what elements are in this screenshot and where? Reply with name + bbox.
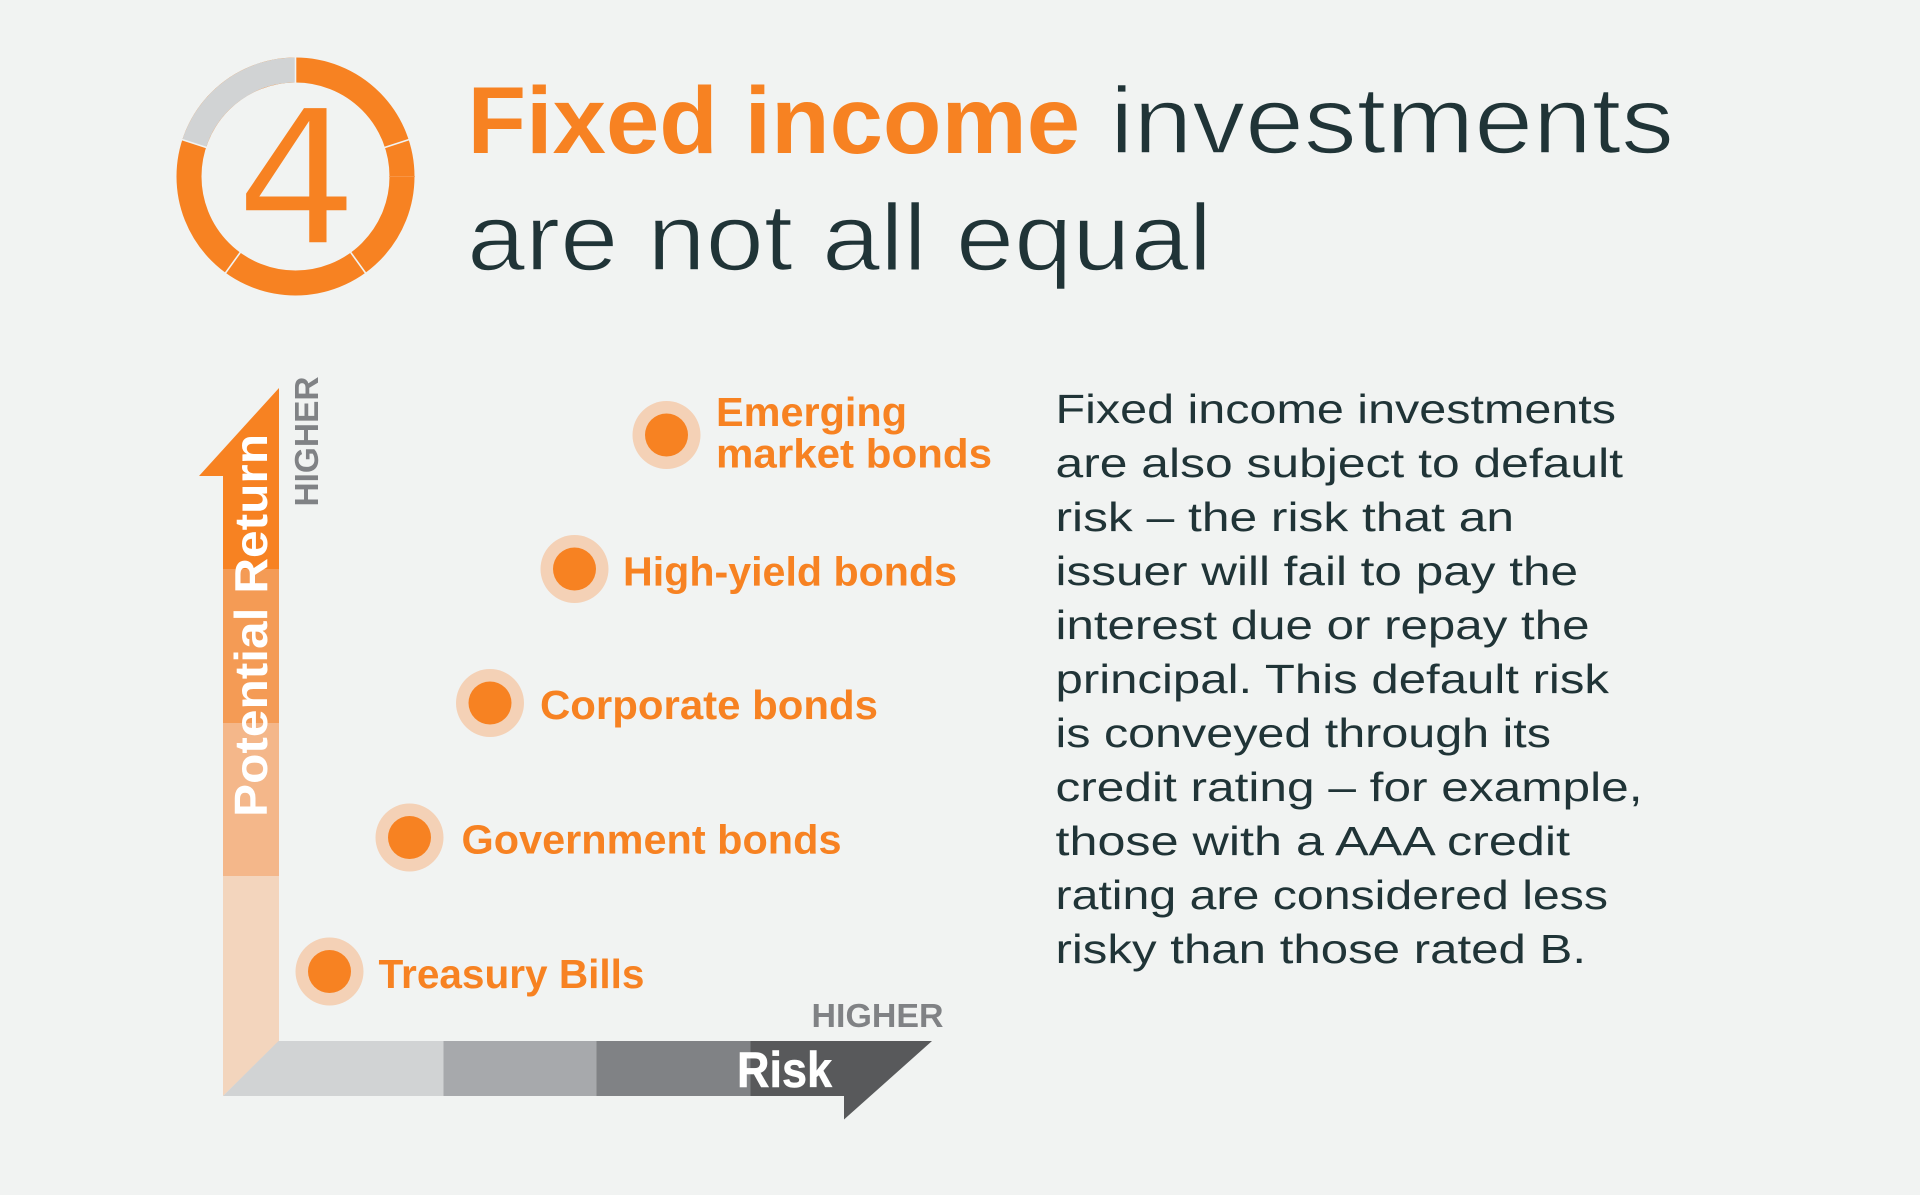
horizontal axis arrow: risk xyxy=(223,1041,932,1120)
data point: Government bonds xyxy=(376,804,842,872)
title: are not all equal xyxy=(467,185,1212,291)
icon: progress ring with number 4 xyxy=(181,56,415,287)
body text: default risk explanation: credit rating – for example, xyxy=(1056,764,1642,810)
body text: default risk explanation: principal. This default risk xyxy=(1056,656,1610,702)
body text: default risk explanation: Fixed income investments xyxy=(1056,386,1616,432)
title xyxy=(467,68,1674,291)
body text: default risk explanation xyxy=(1056,386,1642,972)
body text: default risk explanation: issuer will fail to pay the xyxy=(1056,548,1578,594)
body text: default risk explanation: those with a AAA credit xyxy=(1056,818,1571,864)
vertical axis label: higher: HIGHER xyxy=(288,376,325,506)
body text: default risk explanation: risk – the risk that an xyxy=(1056,494,1514,540)
data point: Corporate bonds: Corporate bonds xyxy=(540,682,878,728)
vertical axis arrow: potential return: Potential Return xyxy=(225,434,277,817)
title: investments xyxy=(1110,68,1674,174)
data point: High-yield bonds: High-yield bonds xyxy=(623,549,957,595)
data point: Government bonds: Government bonds xyxy=(462,816,842,862)
body text: default risk explanation: is conveyed through its xyxy=(1056,710,1551,756)
data point: High-yield bonds xyxy=(540,535,957,603)
body text: default risk explanation: are also subject to default xyxy=(1056,440,1624,486)
vertical axis arrow: potential return xyxy=(199,388,279,1096)
body text: default risk explanation: risky than those rated B. xyxy=(1056,926,1586,972)
body text: default risk explanation: interest due or repay the xyxy=(1056,602,1590,648)
data point: Emerging market bonds: market bonds xyxy=(716,431,992,477)
horizontal axis label: higher: HIGHER xyxy=(812,997,944,1034)
data point: Treasury Bills: Treasury Bills xyxy=(378,951,644,997)
horizontal axis arrow: risk: Risk xyxy=(737,1042,832,1098)
title: Fixed income xyxy=(468,68,1080,174)
icon: progress ring with number 4: 4 xyxy=(236,70,358,287)
body text: default risk explanation: rating are considered less xyxy=(1056,872,1608,918)
data point: Treasury Bills xyxy=(296,938,644,1006)
data point: Emerging market bonds xyxy=(632,389,992,477)
data point: Emerging market bonds: Emerging xyxy=(716,389,907,435)
data point: Corporate bonds xyxy=(456,669,878,737)
